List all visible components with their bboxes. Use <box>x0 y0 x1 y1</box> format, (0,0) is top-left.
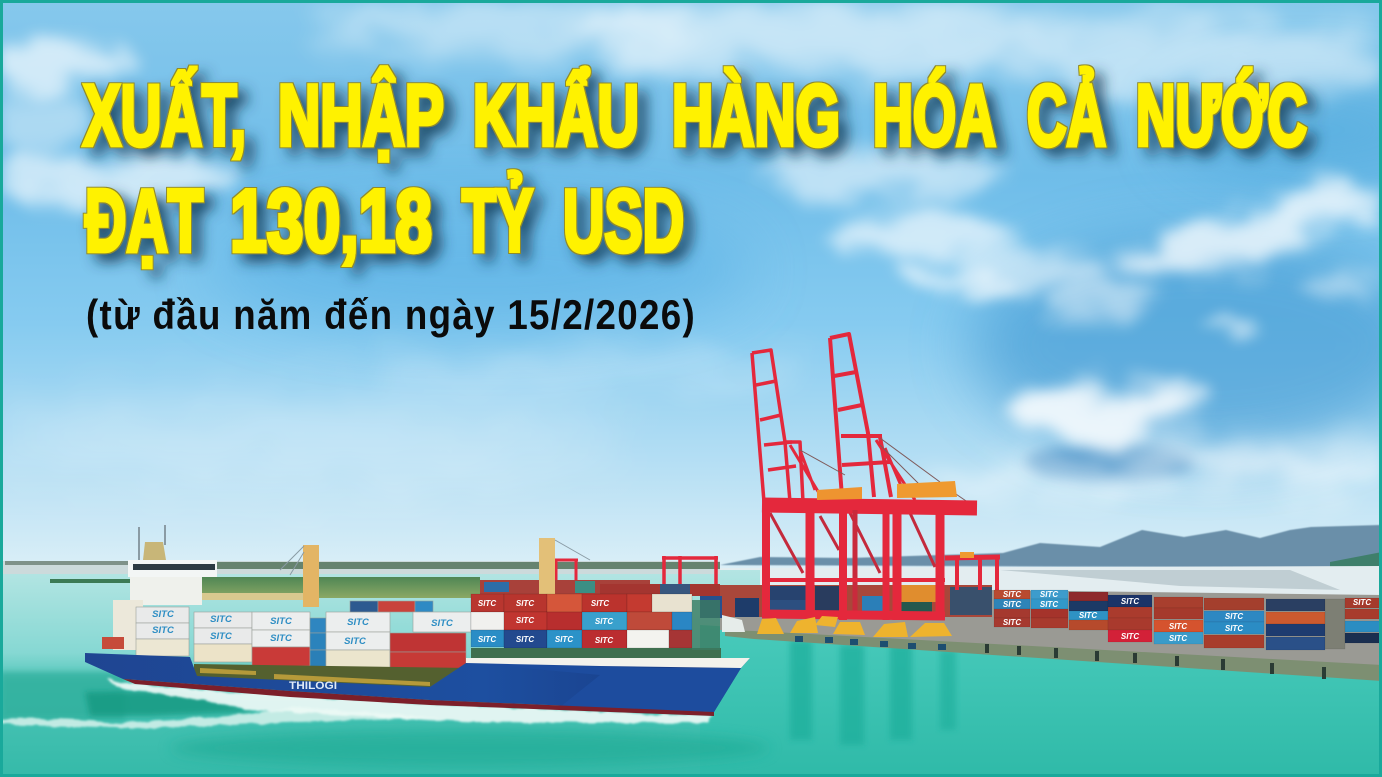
ship: far deck containers and cranes <box>480 580 722 618</box>
headline line 1: CẢ <box>1027 68 1106 164</box>
port containers behind cranes <box>720 585 992 617</box>
ship: SITC container labels: SITC <box>270 633 292 644</box>
container stacks on quay: SITC <box>1079 611 1097 620</box>
far shoreline and land <box>0 561 720 600</box>
headline line 2 <box>85 171 684 270</box>
quay <box>720 590 1382 681</box>
mountains <box>720 525 1380 568</box>
crane machinery house <box>817 481 974 558</box>
ship: SITC container labels: SITC <box>478 599 496 608</box>
ship: hull lettering: THILOGI <box>289 680 337 692</box>
ship: SITC container labels: SITC <box>478 635 496 644</box>
container stacks on quay: SITC <box>1121 597 1139 606</box>
ship: SITC container labels: SITC <box>270 616 292 627</box>
sky background <box>0 0 1382 590</box>
ship wake <box>0 680 714 728</box>
warehouse roofs <box>720 566 1382 595</box>
crane: stay cables <box>800 438 972 505</box>
ship: SITC container labels: SITC <box>210 614 232 625</box>
headline line 1 <box>83 68 1307 164</box>
ship: SITC container labels: SITC <box>152 625 174 636</box>
ship: SITC container labels: SITC <box>591 599 609 608</box>
crane: left boom tower <box>752 350 803 502</box>
ship: SITC container labels: SITC <box>595 617 613 626</box>
container stacks on quay: SITC <box>1040 600 1058 609</box>
container stacks on quay: SITC <box>1225 624 1243 633</box>
container stacks on quay: SITC <box>1003 600 1021 609</box>
ship: SITC container labels: SITC <box>431 618 453 629</box>
container stacks on quay: SITC <box>1169 634 1187 643</box>
cranes <box>555 334 1000 620</box>
ship: SITC container labels: SITC <box>595 636 613 645</box>
ship: superstructure <box>102 525 217 650</box>
headline line 1: HÀNG <box>672 68 840 164</box>
crane: right boom tower <box>830 334 891 497</box>
headline line 1: XUẤT, <box>83 68 246 164</box>
headline line 2: 130,18 <box>230 171 432 270</box>
crane: braces <box>790 440 915 500</box>
ship: derrick posts <box>280 538 590 607</box>
ship: deck rails <box>194 600 721 690</box>
ship: red boot stripe <box>123 679 714 716</box>
ship: SITC container labels: SITC <box>152 609 174 620</box>
container stacks on quay: SITC <box>1003 618 1021 627</box>
container stacks on quay: SITC <box>1225 612 1243 621</box>
headline line 2: USD <box>563 171 684 270</box>
ship: SITC container labels: SITC <box>516 635 534 644</box>
container stacks on quay: SITC <box>1169 622 1187 631</box>
ship: SITC container labels: SITC <box>344 636 366 647</box>
ship: SITC container labels: SITC <box>555 635 573 644</box>
ship: aft container stacks <box>136 601 471 672</box>
container stacks on quay <box>994 590 1380 650</box>
crane: main beam and legs <box>555 505 1000 620</box>
ship: hull <box>85 653 750 712</box>
ship: SITC container labels: SITC <box>210 631 232 642</box>
ship: SITC container labels: SITC <box>347 617 369 628</box>
headline line 2: TỶ <box>462 171 533 270</box>
headline line 1: NHẬP <box>278 68 444 164</box>
ship: SITC container labels <box>152 599 613 647</box>
clouds <box>0 0 1382 498</box>
headline line 2: ĐẠT <box>85 171 203 270</box>
subtitle: (từ đầu năm đến ngày 15/2/2026) <box>86 291 696 338</box>
headline <box>83 68 1307 270</box>
ship: white sheer band <box>466 658 750 668</box>
ship: forward container stacks <box>471 594 692 649</box>
crane yellow bumpers <box>757 616 952 637</box>
sea <box>0 570 1382 777</box>
headline line 1: KHẨU <box>473 68 639 164</box>
ship: SITC container labels: SITC <box>516 616 534 625</box>
ship: SITC container labels: SITC <box>516 599 534 608</box>
container ship <box>85 525 750 716</box>
container stacks on quay: SITC <box>1121 632 1139 641</box>
moored boat <box>722 615 745 632</box>
container stacks on quay: SITC <box>1003 590 1021 599</box>
container stacks on quay: SITC <box>1040 590 1058 599</box>
headline line 1: HÓA <box>873 68 996 164</box>
container stacks on quay: SITC <box>1353 598 1371 607</box>
